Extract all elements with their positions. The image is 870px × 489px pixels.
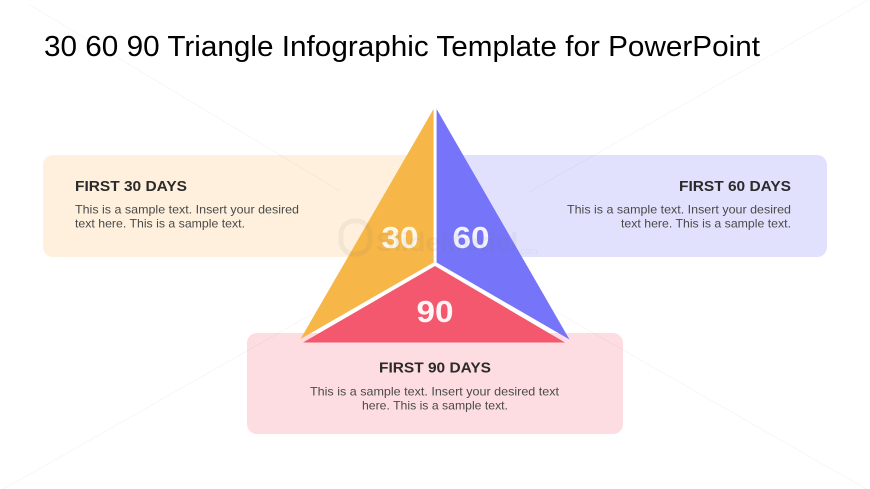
heading: first 60 days: FIRST 60 DAYS <box>679 178 791 195</box>
number: 90: 90 <box>416 294 454 329</box>
watermark <box>341 221 538 257</box>
title: 30 60 90 Triangle Infographic Template for PowerPoint <box>44 31 760 63</box>
segment: 30 <box>300 109 434 339</box>
text block: first 30 days: This is a sample text. Insert your desired <box>75 202 299 216</box>
triangle infographic <box>300 109 570 342</box>
panel: first 90 days <box>247 333 623 434</box>
panel: first 30 days <box>43 155 423 257</box>
segment: 60 <box>437 109 570 340</box>
text block: first 60 days: text here. This is a sample text. <box>621 216 791 230</box>
text block: first 90 days: here. This is a sample text. <box>362 398 508 412</box>
number: 60: 60 <box>452 220 490 255</box>
text block: first 30 days: text here. This is a sample text. <box>75 216 245 230</box>
number: 30: 30 <box>382 220 418 255</box>
heading: first 30 days: FIRST 30 DAYS <box>75 178 187 195</box>
panel: first 60 days <box>447 155 827 257</box>
text block: first 90 days: This is a sample text. Insert your desired text <box>310 384 560 398</box>
watermark: SlideModel <box>376 227 518 257</box>
watermark: .com <box>518 246 538 256</box>
heading: first 90 days: FIRST 90 DAYS <box>379 360 491 376</box>
text block: first 60 days: This is a sample text. Insert your desired <box>567 202 791 216</box>
segment: 90 <box>303 266 565 342</box>
